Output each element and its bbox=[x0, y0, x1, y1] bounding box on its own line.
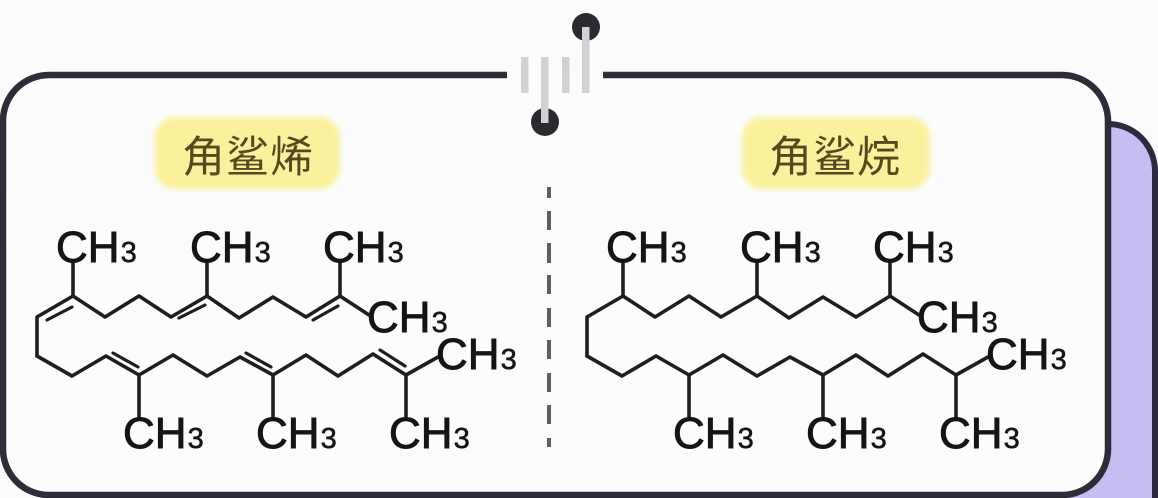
chart: squalene structure: CH3 bbox=[190, 223, 271, 272]
center dashed divider bbox=[547, 187, 551, 447]
chart: squalene structure: CH3 bbox=[389, 409, 470, 458]
chart: squalene structure: CH3 bbox=[123, 409, 204, 458]
chart: squalene structure: CH3 bbox=[436, 330, 517, 379]
chart: squalene structure: CH3 bbox=[256, 409, 337, 458]
heading: squalane: 角鲨烷 bbox=[769, 134, 901, 182]
chart: squalane structure: CH3 bbox=[939, 409, 1020, 458]
icon: binder clips and bars bbox=[521, 13, 600, 136]
chart: squalane structure: CH3 bbox=[806, 409, 887, 458]
chart: squalane structure: CH3 bbox=[917, 293, 998, 342]
chart: squalane structure: CH3 bbox=[873, 223, 954, 272]
heading: squalane bbox=[742, 117, 930, 189]
chart: squalane structure: CH3 bbox=[740, 223, 821, 272]
heading: squalene bbox=[155, 117, 340, 189]
chart: squalene structure: CH3 bbox=[56, 223, 137, 272]
purple card outline bbox=[1100, 124, 1155, 498]
chart: squalane structure: CH3 bbox=[986, 330, 1067, 379]
chart: squalane structure: CH3 bbox=[606, 223, 687, 272]
chart: squalane structure: CH3 bbox=[673, 409, 754, 458]
chart: squalene structure: CH3 bbox=[323, 223, 404, 272]
gap in card top border bbox=[507, 68, 603, 82]
heading: squalene: 角鲨烯 bbox=[182, 134, 314, 182]
chart: squalene structure: CH3 bbox=[367, 293, 448, 342]
chart: squalane structure bbox=[587, 223, 1067, 458]
chart: squalene structure bbox=[37, 223, 517, 458]
panel: purple back card bbox=[1050, 124, 1155, 498]
